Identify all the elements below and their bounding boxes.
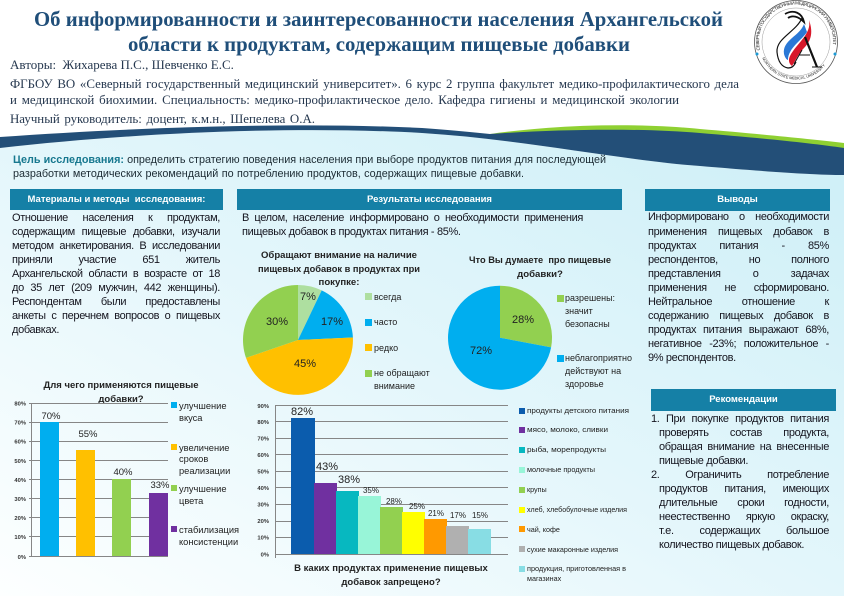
bar chart: prohibited products: 70% bbox=[257, 436, 269, 442]
text: conclusions body: Нейтральное отношение к bbox=[648, 296, 829, 308]
bar chart: uses of additives: Для чего применяются пищевые bbox=[43, 380, 199, 391]
panel: conclusions bbox=[645, 189, 830, 364]
pie chart: attention to additives: 17% bbox=[321, 316, 343, 328]
pie chart: attention to additives bbox=[243, 250, 430, 395]
text: recommendations list: обращая внимание на внесенные bbox=[659, 441, 829, 453]
heading: results: Результаты исследования bbox=[367, 194, 492, 205]
pie chart: opinion on additives: 72% bbox=[470, 345, 492, 357]
bar chart: prohibited products: 0% bbox=[261, 552, 269, 558]
text: conclusions body: негативное -23%; положительное - bbox=[648, 338, 829, 350]
bar chart: prohibited products: мясо, молоко, сливки bbox=[527, 425, 608, 434]
bar chart: uses of additives: вкуса bbox=[179, 413, 203, 423]
text: conclusions body: содержанию пищевых добавок в bbox=[648, 310, 829, 322]
pie chart: attention to additives: 30% bbox=[266, 316, 288, 328]
text: conclusions body: применения пищевых добавок в bbox=[648, 226, 829, 238]
bar chart: uses of additives: 30% bbox=[14, 497, 26, 503]
bar chart: prohibited products: рыба, морепродукты bbox=[527, 445, 606, 454]
pie chart: opinion on additives: значит bbox=[565, 306, 593, 316]
icon: university logo: NORTHERN STATE MEDICAL UNIVERSITY bbox=[762, 57, 825, 80]
pie chart: opinion on additives: добавки? bbox=[517, 269, 563, 280]
bar chart: prohibited products: 15% bbox=[472, 511, 488, 520]
title: области к продуктам, содержащим пищевые добавки bbox=[128, 32, 630, 56]
affiliation: ФГБОУ ВО «Северный государственный медицинский университет». 6 курс 2 группа факультет медико-профилактического дела bbox=[10, 77, 739, 91]
bar chart: prohibited products: 30% bbox=[257, 502, 269, 508]
text: results intro: В целом, население информировано о необходимости применения bbox=[242, 212, 583, 224]
text: conclusions body: продуктах питания - 85% bbox=[648, 240, 829, 252]
icon: university logo bbox=[754, 0, 838, 84]
text: conclusions body: продуктах питания выражают 68%, bbox=[648, 324, 829, 336]
text: recommendations list: длительные сроки годности, bbox=[659, 497, 829, 509]
text: recommendations list: 2. Ограничить потребление bbox=[651, 469, 829, 481]
title: Об информированности и заинтересованности населения Архангельской bbox=[34, 7, 723, 31]
pie chart: attention to additives: всегда bbox=[374, 292, 401, 302]
pie chart: opinion on additives: неблагоприятно bbox=[565, 353, 632, 363]
heading: recommendations: Рекомендации bbox=[709, 394, 778, 405]
panel: materials and methods bbox=[10, 189, 223, 336]
bar chart: prohibited products: В каких продуктах применение пищевых bbox=[294, 563, 489, 574]
bar chart: prohibited products: 21% bbox=[428, 509, 444, 518]
heading: results bbox=[237, 189, 622, 210]
bar chart: prohibited products: магазинах bbox=[527, 574, 562, 583]
text: materials body: содержащим пищевые добавки, изучали bbox=[12, 226, 220, 238]
bar chart: prohibited products: 43% bbox=[316, 461, 338, 473]
bar chart: uses of additives: 40% bbox=[113, 467, 133, 478]
pie chart: opinion on additives: разрешены: bbox=[565, 293, 615, 303]
bar chart: uses of additives: реализации bbox=[179, 466, 230, 476]
bar chart: prohibited products: 25% bbox=[409, 502, 425, 511]
bar chart: uses of additives: 20% bbox=[14, 516, 26, 522]
bar chart: prohibited products: крупы bbox=[527, 485, 547, 494]
bar chart: prohibited products: 17% bbox=[450, 511, 466, 520]
bar chart: prohibited products: 35% bbox=[363, 486, 379, 495]
pie chart: attention to additives: 45% bbox=[294, 358, 316, 370]
text: conclusions body: применения не сформировано. bbox=[648, 282, 829, 294]
text: recommendations list: количество пищевых добавок. bbox=[659, 539, 804, 551]
pie chart: attention to additives: внимание bbox=[374, 381, 415, 391]
pie chart: attention to additives: часто bbox=[374, 317, 397, 327]
bar chart: prohibited products: 10% bbox=[257, 536, 269, 542]
text: materials body: методом анкетирования. В исследовании bbox=[12, 240, 220, 252]
bar chart: uses of additives: 40% bbox=[14, 478, 26, 484]
bar chart: prohibited products: молочные продукты bbox=[527, 465, 595, 474]
bar chart: prohibited products: 90% bbox=[257, 404, 269, 410]
bar chart: uses of additives: добавки? bbox=[98, 394, 144, 405]
text: conclusions body: представления о задачах bbox=[648, 268, 829, 280]
bar chart: prohibited products: 38% bbox=[338, 474, 360, 486]
text: materials body: Архангельской области в возрасте от 18 bbox=[12, 268, 220, 280]
bar chart: uses of additives: увеличение bbox=[179, 443, 229, 453]
text: conclusions body: респондентов, но полного bbox=[648, 254, 829, 266]
pie chart: opinion on additives: безопасны bbox=[565, 319, 610, 329]
text: materials body: до 35 лет (209 мужчин, 442 женщины). bbox=[12, 282, 220, 294]
heading: conclusions: Выводы bbox=[717, 194, 758, 205]
heading: conclusions bbox=[645, 189, 830, 211]
affiliation bbox=[10, 77, 739, 107]
bar chart: prohibited products: продукция, приготовленная в bbox=[527, 564, 626, 573]
text: recommendations list: продуктов питания, имеющих bbox=[659, 483, 829, 495]
bar chart: uses of additives: улучшение bbox=[179, 484, 226, 494]
text: recommendations list: т.е. содержащих большое bbox=[659, 525, 829, 537]
bar chart: uses of additives: сроков bbox=[179, 454, 208, 464]
text: recommendations list: неестественно яркую окраску, bbox=[659, 511, 829, 523]
bar chart: prohibited products: 82% bbox=[291, 406, 313, 418]
pie chart: attention to additives: покупке: bbox=[319, 277, 359, 288]
research goal: Цель исследования: определить стратегию поведения населения при выборе продуктов питания для последующей bbox=[13, 154, 606, 166]
title bbox=[34, 7, 723, 56]
text: materials body: добавках. bbox=[12, 324, 59, 336]
bar chart: uses of additives: консистенции bbox=[179, 537, 238, 547]
bar chart: prohibited products: 28% bbox=[386, 497, 402, 506]
pie chart: attention to additives: пищевых добавок в продуктах при bbox=[258, 264, 420, 275]
research goal bbox=[13, 154, 606, 180]
bar chart: prohibited products: 40% bbox=[257, 486, 269, 492]
icon: university logo: СЕВЕРНЫЙ ГОСУДАРСТВЕННЫЙ МЕДИЦИНСКИЙ УНИВЕРСИТЕТ bbox=[756, 0, 836, 50]
affiliation: и медицинской биохимии. Специальность: медико-профилактическое дело. Кафедра гигиены и медицинской экологии bbox=[10, 93, 679, 107]
bar chart: uses of additives: 80% bbox=[14, 402, 26, 408]
text: materials body: анкеты с перечнем вопросов о пищевых bbox=[12, 310, 220, 322]
pie chart: attention to additives: не обращают bbox=[374, 368, 430, 378]
bar chart: prohibited products: чай, кофе bbox=[527, 525, 560, 534]
bar chart: uses of additives: 60% bbox=[14, 440, 26, 446]
pie chart: attention to additives: 7% bbox=[300, 291, 316, 303]
text: materials body: приняли участие 651 житель bbox=[12, 254, 220, 266]
text: materials body bbox=[12, 212, 220, 336]
bar chart: uses of additives: 33% bbox=[150, 480, 170, 491]
bar chart: prohibited products: хлеб, хлебобулочные изделия bbox=[527, 505, 627, 514]
panel: recommendations bbox=[651, 389, 836, 551]
text: recommendations list: пищевые добавки. bbox=[659, 455, 748, 467]
research goal: разработки методических рекомендаций по потреблению продуктов, содержащих пищевые добавки. bbox=[13, 168, 524, 180]
text: materials body: Отношение населения к продуктам, bbox=[12, 212, 220, 224]
pie chart: opinion on additives: действуют на bbox=[565, 366, 621, 376]
text: results intro: пищевых добавок в продуктах питания - 85%. bbox=[242, 226, 461, 238]
text: conclusions body: Информировано о необходимости bbox=[648, 211, 829, 223]
bar chart: uses of additives: 70% bbox=[14, 420, 26, 426]
bar chart: prohibited products: сухие макаронные изделия bbox=[527, 545, 618, 554]
bar chart: prohibited products: 50% bbox=[257, 470, 269, 476]
text: recommendations list: 1. При покупке продуктов питания bbox=[651, 413, 829, 425]
authors: Авторы: Жихарева П.С., Шевченко Е.С. bbox=[10, 57, 234, 72]
bar chart: uses of additives: стабилизация bbox=[179, 525, 239, 535]
bar chart: uses of additives: 10% bbox=[14, 535, 26, 541]
pie chart: opinion on additives: 28% bbox=[512, 314, 534, 326]
pie chart: attention to additives: редко bbox=[374, 343, 398, 353]
bar chart: uses of additives bbox=[14, 380, 239, 560]
text: conclusions body bbox=[648, 211, 830, 364]
bar chart: prohibited products: 20% bbox=[257, 519, 269, 525]
heading: recommendations bbox=[651, 389, 836, 411]
text: recommendations list: проверять состав продукта, bbox=[659, 427, 829, 439]
pie chart: opinion on additives: здоровье bbox=[565, 379, 604, 389]
text: materials body: Респондентам были предоставлены bbox=[12, 296, 220, 308]
text: recommendations list bbox=[651, 413, 830, 551]
bar chart: uses of additives: 70% bbox=[41, 411, 61, 422]
pie chart: attention to additives: Обращают внимание на наличие bbox=[261, 250, 417, 261]
bar chart: prohibited products: продукты детского питания bbox=[527, 406, 629, 415]
pie chart: opinion on additives: Что Вы думаете про пищевые bbox=[469, 255, 611, 266]
bar chart: uses of additives: 50% bbox=[14, 459, 26, 465]
bar chart: uses of additives: цвета bbox=[179, 496, 204, 506]
bar chart: uses of additives: 55% bbox=[78, 429, 98, 440]
bar chart: uses of additives: улучшение bbox=[179, 401, 226, 411]
panel: results bbox=[237, 189, 622, 238]
bar chart: prohibited products bbox=[257, 404, 629, 588]
heading: materials bbox=[10, 189, 223, 210]
bar chart: prohibited products: 60% bbox=[257, 453, 269, 459]
bar chart: prohibited products: 80% bbox=[257, 420, 269, 426]
supervisor: Научный руководитель: доцент, к.м.н., Шепелева О.А. bbox=[10, 112, 315, 126]
heading: materials: Материалы и методы исследования: bbox=[28, 194, 205, 205]
text: conclusions body: 9% респондентов. bbox=[648, 352, 736, 364]
pie chart: opinion on additives bbox=[448, 255, 632, 390]
bar chart: prohibited products: добавок запрещено? bbox=[341, 577, 441, 588]
text: results intro bbox=[242, 212, 583, 238]
